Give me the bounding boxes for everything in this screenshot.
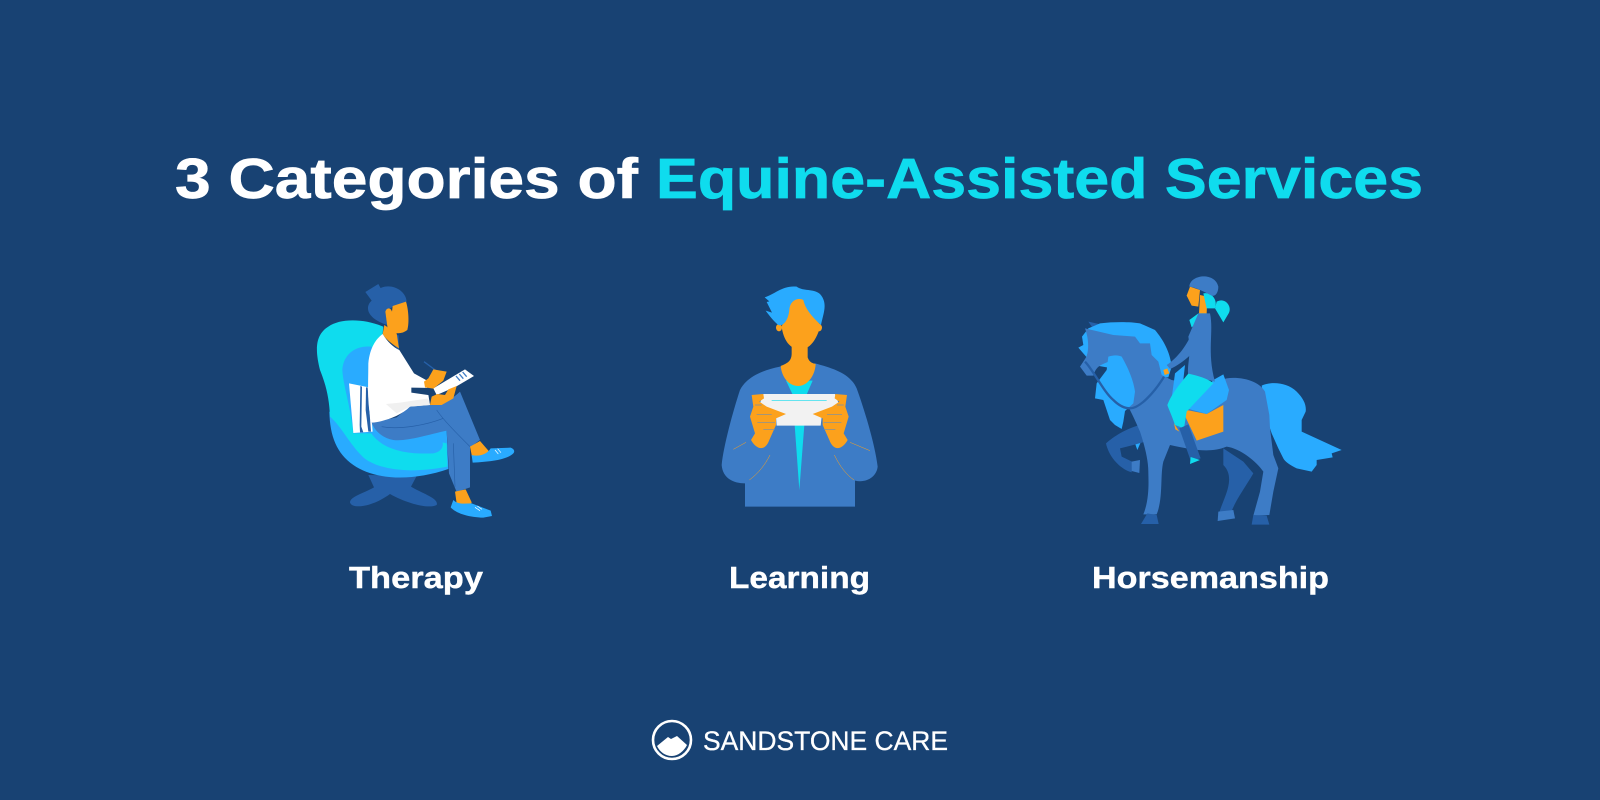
- hands: [750, 394, 849, 448]
- title: Equine-Assisted Services: [656, 147, 1423, 211]
- trousers: [372, 392, 480, 492]
- logo: Sandstone Care: [653, 721, 948, 759]
- label: therapy: Therapy: [349, 560, 484, 595]
- icon: woman seated in armchair taking notes: [317, 284, 514, 518]
- label: horsemanship: Horsemanship: [1092, 560, 1329, 595]
- hooves: [1141, 513, 1269, 525]
- icon: man reading a tablet: [722, 286, 878, 507]
- label: learning: Learning: [729, 560, 870, 595]
- face: [385, 302, 408, 333]
- horse body: [1080, 328, 1278, 516]
- tablet: [759, 394, 839, 426]
- torso: [368, 334, 430, 423]
- saddle: [1172, 365, 1229, 441]
- panel: therapy: [317, 284, 514, 595]
- hair: [765, 286, 825, 325]
- feet and shoes: [451, 441, 514, 518]
- pillow: [349, 383, 373, 433]
- hair: [365, 284, 407, 325]
- icon: rider on horse: [1078, 276, 1342, 525]
- panel: learning: [722, 286, 878, 595]
- wordmark: SANDSTONE CARE: [703, 726, 948, 756]
- mane: [1078, 322, 1172, 377]
- forelock: [1095, 355, 1135, 429]
- sleeve creases: [733, 442, 870, 480]
- notepad: [433, 369, 474, 395]
- title: [175, 147, 1423, 211]
- reins: [1085, 362, 1164, 408]
- title: 3 Categories of: [175, 147, 639, 211]
- rider: [1163, 276, 1230, 464]
- panel: horsemanship: [1078, 276, 1342, 595]
- hands and pen: [424, 362, 457, 405]
- icon: mountain roundel: [653, 721, 691, 759]
